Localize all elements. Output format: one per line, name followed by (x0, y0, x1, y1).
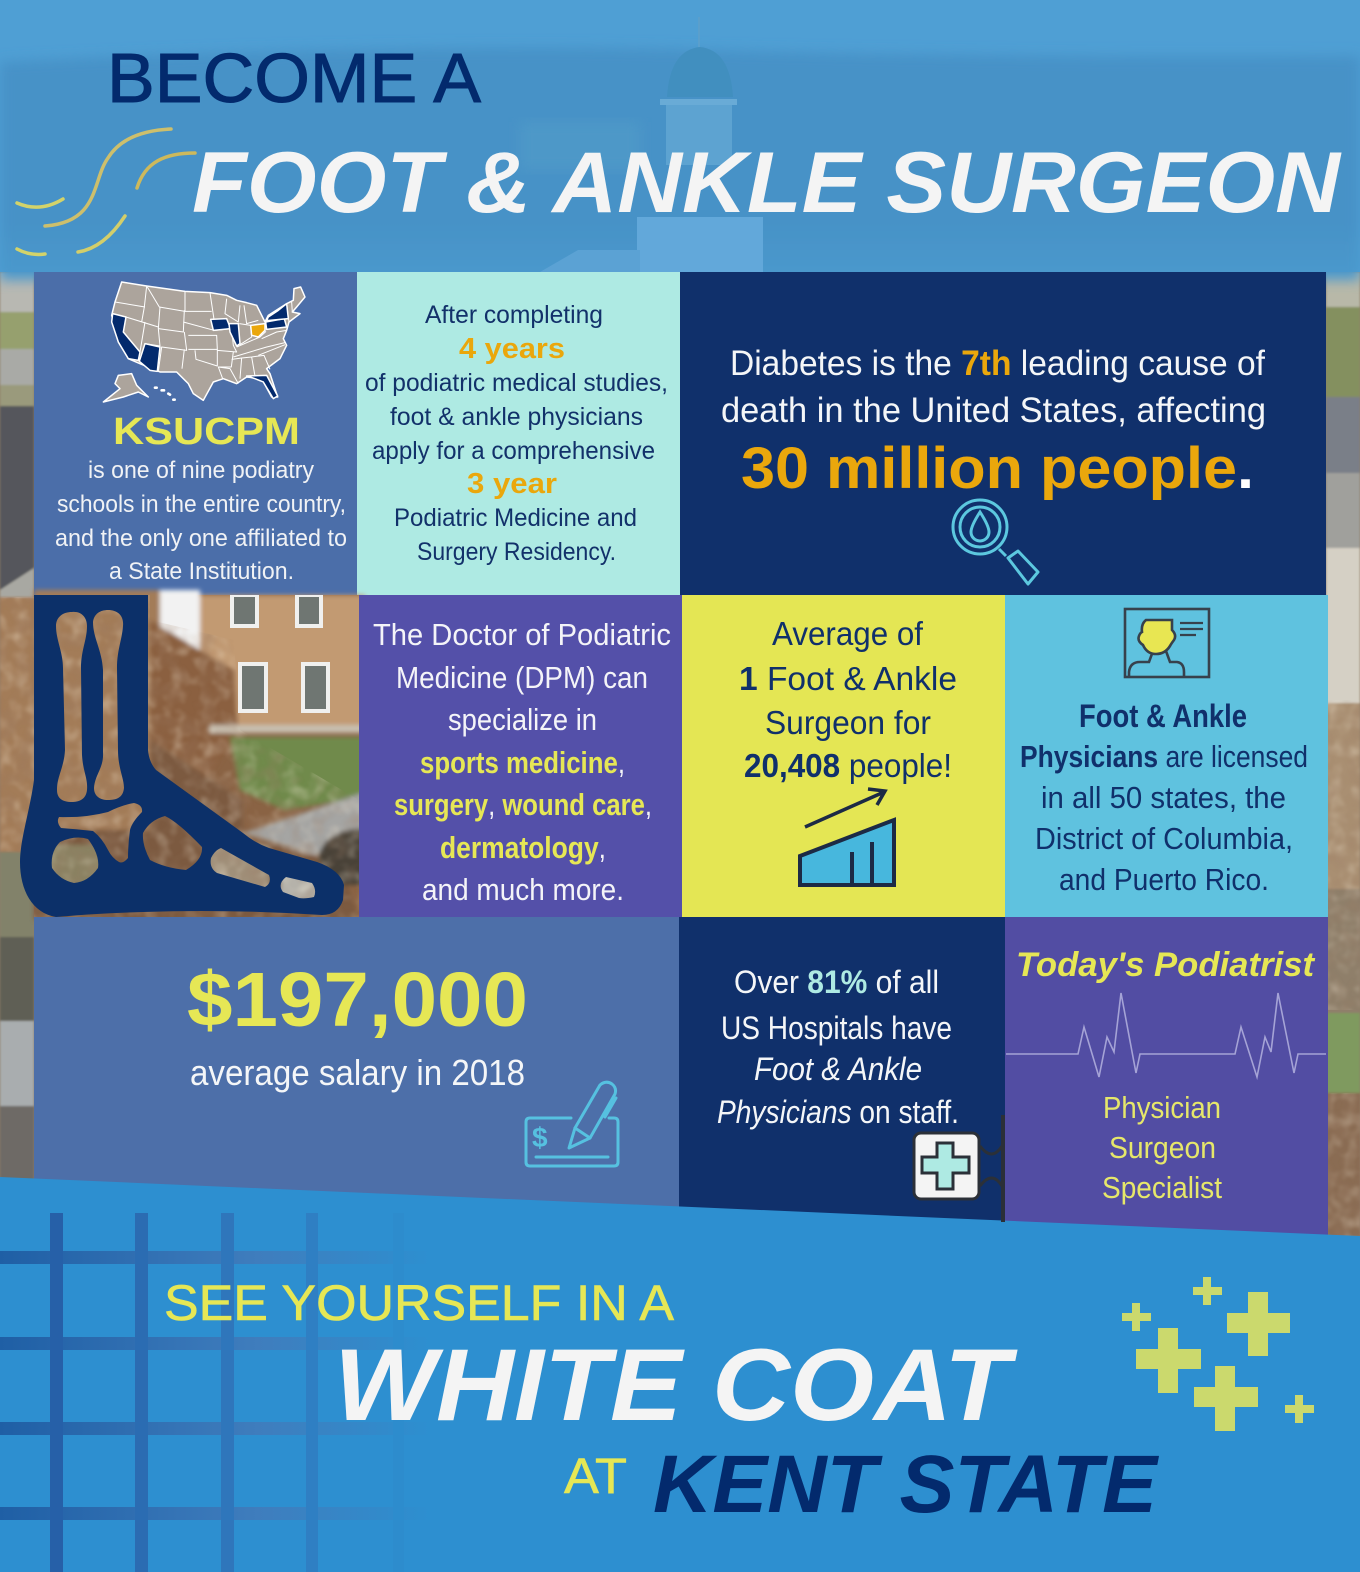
icon: check and pen: $ (532, 1122, 548, 1153)
panel: years of study: Surgery Residency. (417, 538, 616, 566)
text: specialties: dermatology, (440, 830, 606, 865)
panel: DPM specialties: The Doctor of Podiatric (373, 617, 671, 652)
panel: years of study (357, 272, 680, 595)
panel: salary (34, 917, 679, 1237)
text: white coat: WHITE COAT (334, 1328, 1018, 1442)
icon: foot skeleton (20, 595, 344, 917)
panel: years of study: foot & ankle physicians (390, 403, 643, 431)
panel: KSUCPM (34, 272, 357, 595)
background photo strips (0, 272, 1360, 1236)
text: specialties (394, 745, 652, 865)
icon: hospital sign (914, 1115, 1003, 1222)
text: KSUCPM description (55, 457, 347, 585)
panel: DPM specialties: specialize in (448, 702, 597, 737)
panel: licensed: Physicians are licensed (1020, 739, 1308, 774)
panel: DPM specialties (359, 595, 682, 917)
icon: ID card (1125, 609, 1209, 677)
stat: 4 years: 4 years (459, 333, 565, 365)
panel: hospitals: Physicians on staff. (717, 1094, 959, 1130)
grid pattern (0, 1213, 430, 1572)
panel: surgeon ratio: Average of (772, 615, 924, 652)
panel: today's podiatrist (1005, 917, 1328, 1237)
panel: years of study: After completing (425, 301, 603, 329)
header background (0, 0, 1360, 280)
panel: years of study: apply for a comprehensive (372, 437, 655, 465)
stat: 30 million people: 30 million people . (741, 436, 1254, 501)
text: kent state: KENT STATE (653, 1439, 1159, 1530)
foliage texture (0, 590, 1360, 1240)
panel: licensed: and Puerto Rico. (1059, 862, 1269, 897)
icon: growth chart (800, 789, 894, 885)
text: roles (1102, 1090, 1222, 1205)
panel: years of study: Podiatric Medicine and (394, 504, 637, 532)
panel: salary: average salary in 2018 (190, 1052, 525, 1093)
text: KSUCPM description: a State Institution. (109, 558, 294, 585)
panel: diabetes: Diabetes is the 7th leading cause of (730, 344, 1265, 383)
panel: surgeon ratio: Surgeon for (765, 704, 931, 741)
text: KSUCPM description: schools in the entire country, (57, 491, 346, 518)
text: KSUCPM description: is one of nine podiatry (88, 457, 314, 484)
panel: surgeon ratio: 20,408 people! (744, 747, 952, 784)
stat: salary: $197,000 (187, 957, 528, 1043)
title: become a: BECOME A (107, 39, 481, 117)
text: see yourself: SEE YOURSELF IN A (164, 1275, 675, 1331)
panel: hospitals: Over 81% of all (734, 964, 939, 1000)
stat: 3 year: 3 year (467, 468, 557, 500)
panel: hospitals: Foot & Ankle (754, 1051, 922, 1087)
panel: hospitals (679, 917, 1005, 1237)
photo: building behind foot (34, 590, 365, 920)
icon: swoosh lines (17, 129, 195, 254)
chart: heartbeat line (1006, 993, 1326, 1077)
panel: licensed: District of Columbia, (1035, 821, 1293, 856)
text: roles: Physician (1103, 1090, 1221, 1125)
panel: licensed: in all 50 states, the (1041, 780, 1286, 815)
text: specialties: surgery, wound care, (394, 787, 652, 822)
text: KSUCPM description: and the only one affiliated to (55, 525, 347, 552)
panel: surgeon ratio (682, 595, 1005, 917)
icon: US map (103, 282, 305, 402)
panel: surgeon ratio: 1 Foot & Ankle (739, 660, 957, 697)
icon: check and pen (526, 1082, 618, 1166)
panel: diabetes: death in the United States, affecting (721, 391, 1266, 430)
text: at: AT (564, 1448, 627, 1504)
panel: licensed (1005, 595, 1328, 917)
panel: DPM specialties: and much more. (422, 872, 624, 907)
text: roles: Surgeon (1109, 1130, 1216, 1165)
text: specialties: sports medicine, (420, 745, 625, 780)
footer band (0, 1115, 1360, 1572)
text: roles: Specialist (1102, 1170, 1222, 1205)
windows (230, 595, 330, 713)
panel: today's podiatrist: Today's Podiatrist (1016, 946, 1316, 984)
icon: magnifier with drop (953, 500, 1038, 584)
panel: hospitals: US Hospitals have (721, 1010, 952, 1046)
title: foot and ankle surgeon: FOOT & ANKLE SURGEON (192, 135, 1342, 231)
heading: KSUCPM: KSUCPM (113, 411, 300, 453)
panel: licensed: Foot & Ankle (1079, 698, 1247, 734)
panel: diabetes (680, 272, 1326, 595)
icon: plus signs (1122, 1277, 1314, 1431)
panel: years of study: of podiatric medical studies, (365, 369, 668, 397)
panel: DPM specialties: Medicine (DPM) can (396, 660, 648, 695)
